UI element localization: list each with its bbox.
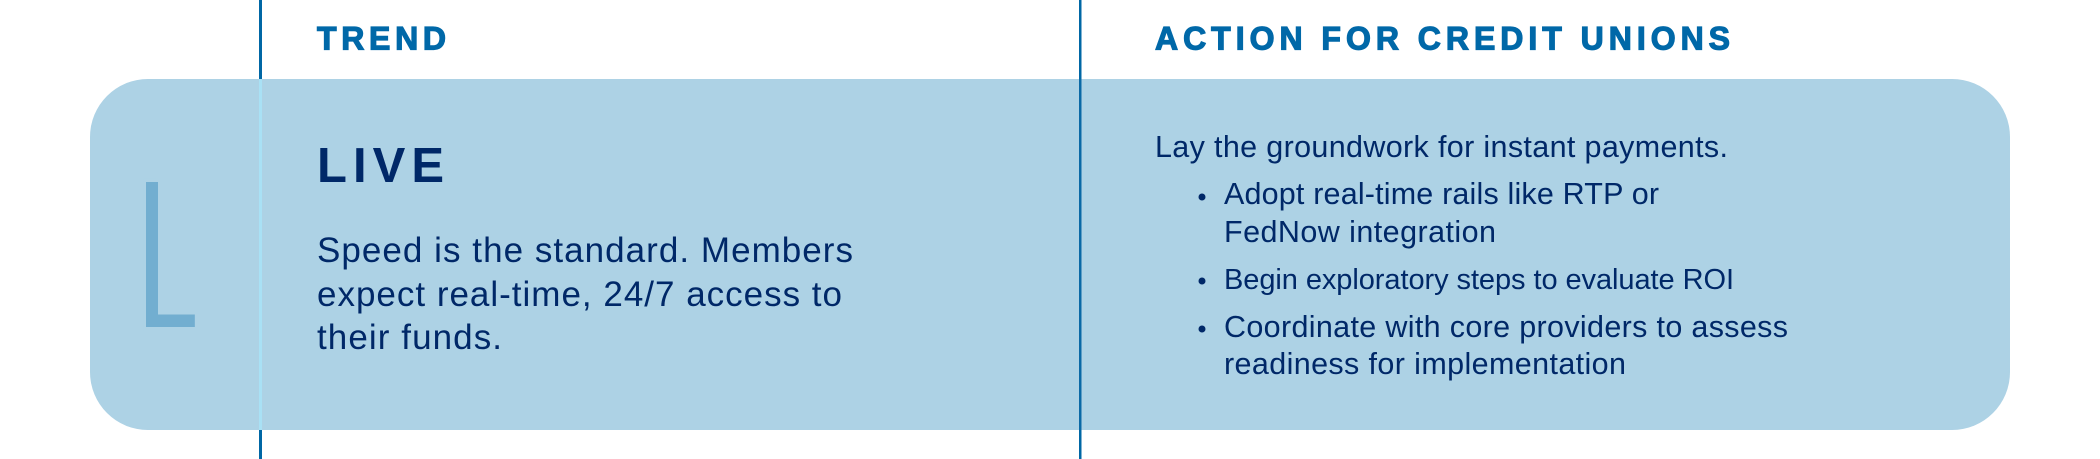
heading: trend: TREND: [317, 20, 446, 56]
list item: core providers: Coordinate with core providers to assess: [1224, 310, 1788, 344]
list item: rails: FedNow integration: [1224, 215, 1496, 249]
column divider: right: [1079, 0, 1082, 459]
panel divider: right: [1079, 79, 1082, 430]
heading: action for credit unions: ACTION FOR CREDIT UNIONS: [1155, 20, 1730, 56]
icon: large letter L: L: [135, 133, 200, 375]
panel background: [90, 79, 2010, 430]
action summary: Lay the groundwork for instant payments.: [1155, 130, 1728, 164]
trend description: their funds.: [317, 318, 502, 357]
column divider: left: [259, 0, 262, 459]
trend description: Speed is the standard. Members: [317, 231, 853, 270]
action list: [1198, 177, 1788, 381]
list item: rails: [1198, 177, 1659, 249]
list item: core providers: readiness for implementation: [1224, 347, 1626, 381]
panel divider: left: [259, 79, 262, 430]
trend description: expect real-time, 24/7 access to: [317, 275, 842, 314]
list item: rails: Adopt real-time rails like RTP or: [1224, 177, 1659, 211]
list item: ROI: Begin exploratory steps to evaluate ROI: [1224, 264, 1734, 296]
trend title: LIVE: [317, 139, 444, 193]
list item: core providers: [1198, 310, 1788, 381]
trend description: [317, 231, 853, 357]
